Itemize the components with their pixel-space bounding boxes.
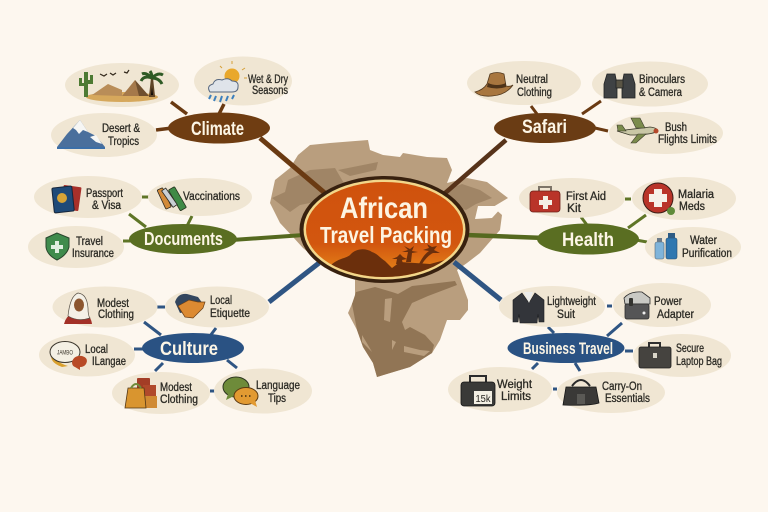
item: Binoculars & Camera <box>592 62 708 106</box>
item: Language Tips <box>214 368 312 414</box>
icon: woman in headscarf <box>64 293 92 324</box>
item: desert scene <box>65 63 179 107</box>
label: Local <box>210 295 232 307</box>
icon: medicine badge <box>643 183 675 215</box>
heading: Culture <box>142 333 244 363</box>
icon: JAMBO speech bubbles: JAMBO <box>57 350 73 356</box>
label <box>682 235 732 260</box>
label <box>678 189 715 213</box>
label <box>516 74 552 99</box>
center title badge: Travel Packing <box>320 222 452 248</box>
label: Bush <box>665 122 687 134</box>
icon: handshake <box>175 294 205 318</box>
item: Local Etiquette <box>165 286 269 328</box>
item: Vaccinations <box>148 178 252 216</box>
icon: bush plane <box>617 118 658 143</box>
icon: chat bubbles <box>223 377 258 407</box>
label <box>160 382 198 406</box>
center title badge <box>300 176 470 285</box>
connector: Health to center <box>466 235 545 238</box>
heading: Climate: Climate <box>191 119 244 140</box>
icon: desert <box>79 70 163 102</box>
item: First Aid Kit <box>519 178 625 218</box>
label: Purification <box>682 248 732 260</box>
heading: Business Travel: Business Travel <box>523 339 613 358</box>
label <box>602 381 650 405</box>
label <box>97 298 134 321</box>
label: Wet & Dry <box>248 74 288 86</box>
label: Tropics <box>108 136 139 148</box>
item: Neutral Clothing <box>467 61 581 105</box>
label: Tips <box>268 393 286 405</box>
icon: binoculars <box>604 74 635 98</box>
label: Vaccinations <box>183 191 240 203</box>
label <box>547 296 597 321</box>
item: Wet & Dry Seasons <box>194 56 292 106</box>
icon: first aid kit <box>530 187 560 212</box>
label: Adapter <box>657 309 694 321</box>
icon: carry-on bag <box>563 380 599 405</box>
connector: Culture to center <box>269 263 319 302</box>
item: Travel Insurance <box>28 226 124 268</box>
label: Local <box>85 344 108 356</box>
item: Passport & Visa <box>34 176 142 218</box>
label: Flights Limits <box>658 134 717 146</box>
label <box>676 343 722 368</box>
heading: Climate <box>168 112 270 144</box>
label: Neutral <box>516 74 548 86</box>
label: Travel <box>76 236 103 248</box>
label <box>85 344 126 368</box>
map: Africa silhouette with trees <box>270 140 508 377</box>
label: ILangae <box>92 356 126 368</box>
connector: Documents to center <box>232 235 304 240</box>
label <box>256 380 300 405</box>
label: Clothing <box>160 394 198 406</box>
icon: power adapter <box>624 292 650 319</box>
label <box>658 122 717 146</box>
label: Water <box>690 235 717 247</box>
label: First Aid <box>566 191 606 203</box>
icon: stacked bags <box>125 378 157 408</box>
icon: passport <box>52 185 82 213</box>
heading: Documents <box>129 224 237 254</box>
item: Malaria Meds <box>632 177 736 220</box>
label: Etiquette <box>210 308 250 320</box>
label: & Camera <box>639 87 682 99</box>
label: Insurance <box>72 248 114 260</box>
label: Essentials <box>605 393 650 405</box>
item: Secure Laptop Bag <box>633 334 731 377</box>
label: Malaria <box>678 189 715 201</box>
heading: Business Travel <box>508 333 624 363</box>
icon: suit jacket <box>513 292 544 323</box>
connector: Business Travel to center <box>454 262 501 300</box>
heading: Health <box>537 224 639 254</box>
heading: Safari: Safari <box>522 117 567 138</box>
label: Meds <box>679 201 705 213</box>
branch: Documents <box>28 176 252 268</box>
label <box>654 296 694 321</box>
label <box>86 188 124 212</box>
icon: laptop bag <box>639 343 671 368</box>
icon: sun and rain cloud <box>209 61 247 102</box>
item: Local Language <box>39 334 135 376</box>
connector: Climate to center <box>260 138 326 194</box>
label: Modest <box>160 382 193 394</box>
label <box>566 191 606 215</box>
item: Weight Limits <box>448 367 552 412</box>
label: Secure <box>676 343 704 355</box>
icon: water bottles <box>655 233 677 259</box>
label: Lightweight <box>547 296 597 308</box>
connector: Safari to center <box>444 140 506 194</box>
label <box>639 74 685 99</box>
icon: shield <box>46 233 69 260</box>
label <box>102 123 140 148</box>
item: Water Purification <box>645 227 741 267</box>
item: Lightweight Suit <box>499 286 605 327</box>
label: Weight <box>497 379 533 391</box>
label: & Visa <box>92 200 122 212</box>
label: Clothing <box>517 87 552 99</box>
label: Power <box>654 296 682 308</box>
label: Laptop Bag <box>676 356 722 368</box>
icon: luggage with 15kg tag: 15k <box>476 394 491 405</box>
heading: Documents: Documents <box>144 229 223 249</box>
item: Desert & Tropics <box>51 113 157 157</box>
label: Limits <box>501 391 531 403</box>
label: Binoculars <box>639 74 685 86</box>
branch: Health <box>519 177 741 267</box>
label: Suit <box>557 309 576 321</box>
label: Clothing <box>98 309 134 321</box>
title text: African <box>340 192 428 225</box>
branch: Culture <box>39 286 312 414</box>
label: Desert & <box>102 123 140 135</box>
heading: Culture: Culture <box>160 339 218 360</box>
branch: Safari <box>467 61 723 154</box>
heading: Health: Health <box>562 230 614 251</box>
label: Passport <box>86 188 124 200</box>
branch: Climate <box>51 56 292 157</box>
item: Bush Flights Limits <box>609 112 723 154</box>
item: Carry-On Essentials <box>557 372 665 413</box>
icon: vaccine vials <box>157 187 186 211</box>
label <box>497 379 533 403</box>
branch: Business Travel <box>448 283 731 413</box>
item: Modest Clothing <box>52 286 158 328</box>
label: Language <box>256 380 300 392</box>
savanna silhouette <box>332 244 444 277</box>
label: Seasons <box>252 85 288 97</box>
label: Carry-On <box>602 381 642 393</box>
item: Power Adapter <box>613 283 711 327</box>
label <box>72 236 114 260</box>
label <box>248 74 288 97</box>
heading: Safari <box>494 113 596 143</box>
icon: safari hat <box>475 72 513 96</box>
item: Modest Clothing (bags) <box>112 372 210 414</box>
label: Modest <box>97 298 130 310</box>
label: Kit <box>567 203 582 215</box>
label <box>210 295 250 320</box>
icon: mountains <box>57 120 105 148</box>
